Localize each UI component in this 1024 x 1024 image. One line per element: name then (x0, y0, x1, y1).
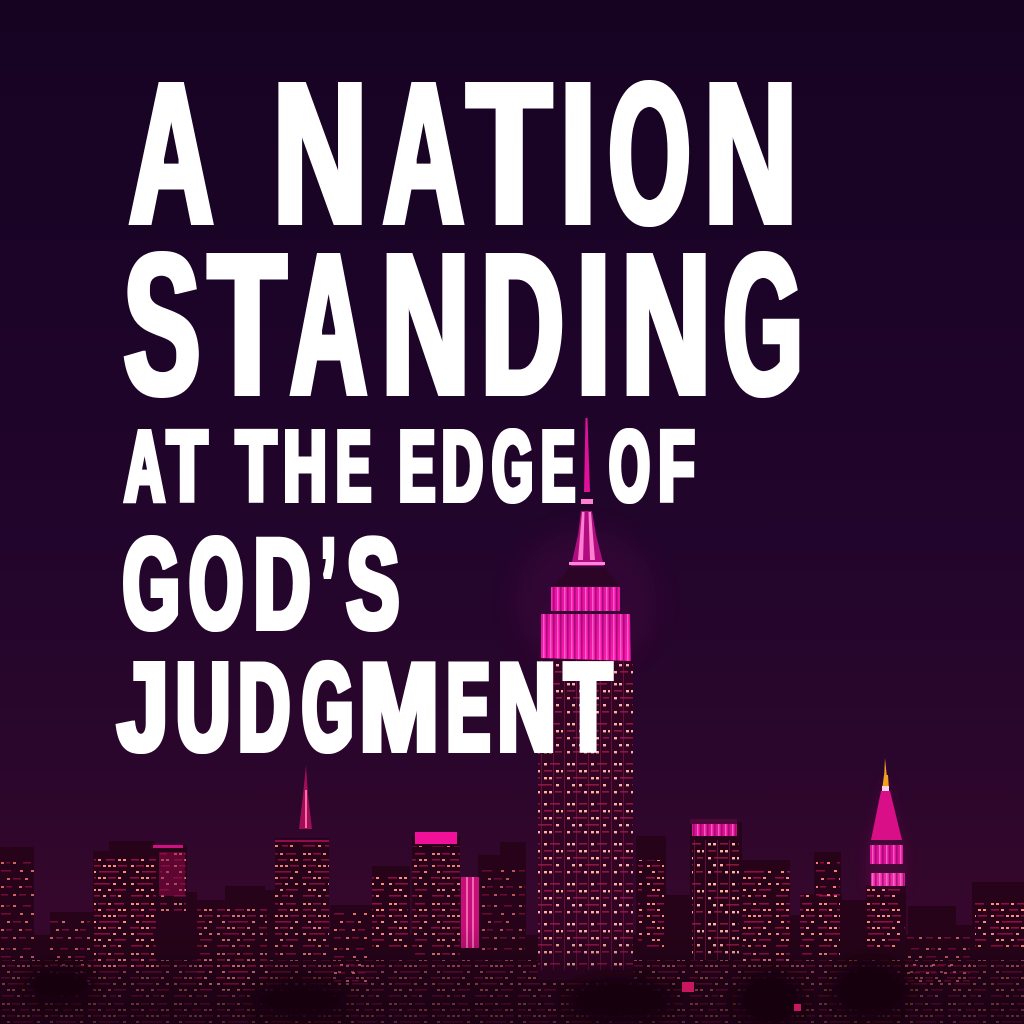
title line: STANDING: D (481, 211, 564, 437)
title line: JUDGMENT: D (238, 639, 290, 777)
title line: JUDGMENT: T (564, 639, 612, 777)
title line: A NATION: A (383, 40, 464, 266)
title line: GOD'S: ’ (322, 513, 335, 656)
title line: STANDING: N (622, 211, 710, 437)
title line: AT THE EDGE OF: T (167, 410, 207, 522)
title line: AT THE EDGE OF: E (399, 410, 435, 522)
title line: A NATION: I (561, 40, 595, 266)
title line: AT THE EDGE OF: F (658, 410, 694, 522)
skyline: city buildings (0, 418, 1024, 1024)
glow: behind tower crown (516, 530, 656, 670)
title line: JUDGMENT: M (360, 639, 438, 777)
title line: AT THE EDGE OF: A (124, 410, 165, 522)
tower lit lower crown (541, 614, 631, 661)
tower dark cap (553, 568, 620, 587)
title line: JUDGMENT: E (447, 639, 490, 777)
back row buildings (0, 822, 1024, 1024)
bottom street-level shading (0, 925, 1024, 1024)
title line: JUDGMENT: J (118, 639, 168, 777)
title line: AT THE EDGE OF: E (336, 410, 371, 522)
title line: JUDGMENT: N (498, 639, 556, 777)
spire (569, 418, 605, 566)
title line: GOD'S: G (123, 513, 180, 656)
metlife pyramid (871, 791, 902, 840)
title line: AT THE EDGE OF: D (442, 410, 483, 522)
street-level pink lights (682, 982, 801, 1011)
tower lit upper crown (551, 587, 620, 611)
title line: STANDING: A (290, 211, 367, 437)
title line: JUDGMENT: U (176, 639, 230, 777)
title line: AT THE EDGE OF: O (609, 410, 650, 522)
metlife gold tip (882, 758, 889, 790)
building windows (0, 840, 1024, 1024)
pink lit strip building (461, 877, 479, 948)
title line: STANDING: N (382, 211, 469, 437)
title line: STANDING: S (124, 211, 200, 437)
title line: AT THE EDGE OF: E (541, 410, 575, 522)
title line: STANDING: T (208, 211, 286, 437)
title line: A NATION: O (609, 40, 690, 266)
title line: STANDING: G (723, 211, 803, 437)
dark foreground masses (25, 960, 910, 1024)
metlife upper band (870, 845, 903, 864)
metlife glow (866, 775, 906, 890)
title line: A NATION: T (467, 40, 551, 266)
pink crown: building at 412 (415, 832, 457, 844)
title line: A NATION: A (129, 40, 211, 266)
title (118, 40, 803, 777)
title line: AT THE EDGE OF: H (284, 410, 327, 522)
title line: AT THE EDGE OF: T (236, 410, 276, 522)
empire-state-style tower (538, 418, 633, 980)
metlife-style tower (866, 758, 906, 890)
pink crown: building at 155 (153, 845, 185, 896)
title line: GOD'S: D (254, 513, 310, 656)
title line: GOD'S: O (189, 513, 243, 656)
metlife lower band (871, 873, 905, 886)
tower windows (538, 660, 633, 970)
left spired tower (275, 765, 329, 842)
title line: A NATION: N (704, 40, 797, 266)
pink crown: building at 690 (690, 819, 737, 836)
title line: STANDING: I (577, 211, 610, 437)
tower body (538, 660, 633, 980)
title line: JUDGMENT: G (302, 639, 353, 777)
title line: A NATION: N (273, 40, 367, 266)
title line: GOD'S: S (347, 513, 399, 656)
title line: AT THE EDGE OF: G (492, 410, 533, 522)
